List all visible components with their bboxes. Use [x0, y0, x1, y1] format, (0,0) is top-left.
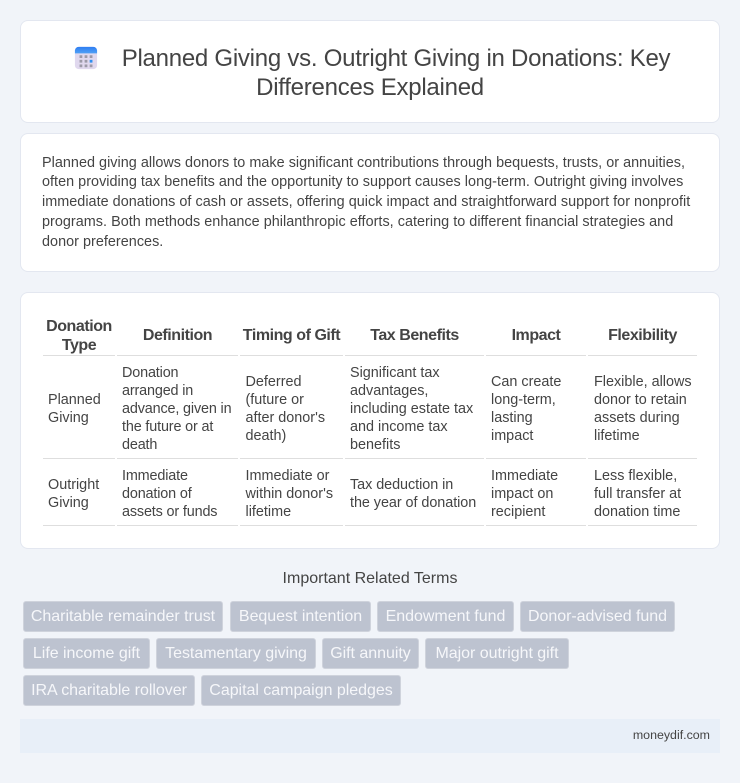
related term tags: Life income gift: [33, 645, 140, 662]
related term tags: Capital campaign pledges: [209, 682, 393, 699]
related term tags: IRA charitable rollover: [31, 682, 187, 699]
table row: outright giving: donation time: [594, 504, 680, 520]
heading: important related terms: Important Related Terms: [283, 570, 457, 587]
table row: planned giving: after donor's: [246, 410, 325, 426]
table row: planned giving: benefits: [350, 437, 400, 453]
table row: planned giving: [48, 365, 692, 453]
table row: outright giving: Tax deduction in: [350, 477, 453, 493]
table row: outright giving: impact on: [491, 486, 553, 502]
title: Differences Explained: [256, 74, 484, 100]
related term tags: Gift annuity: [330, 645, 411, 662]
footer: [20, 719, 720, 753]
table header row: Donation: [46, 318, 112, 335]
table header row: Flexibility: [608, 327, 677, 344]
table row: planned giving: arranged in: [122, 383, 193, 399]
table header row: Type: [62, 337, 96, 354]
related term tags: Donor-advised fund: [528, 608, 667, 625]
icon: calendar: [74, 46, 98, 70]
table row: planned giving: and income tax: [350, 419, 448, 435]
table row: planned giving: Giving: [48, 410, 89, 426]
intro paragraph: donor preferences.: [42, 234, 163, 250]
table row: outright giving: assets or funds: [122, 504, 217, 520]
table row: planned giving: advance, given in: [122, 401, 231, 417]
table row: outright giving: Immediate: [122, 468, 188, 484]
related term tags: Testamentary giving: [165, 645, 307, 662]
table row: planned giving: Flexible, allows: [594, 374, 692, 390]
table row: outright giving: donation of: [122, 486, 192, 502]
table row: outright giving: [48, 468, 682, 520]
table row: planned giving: donor to retain: [594, 392, 687, 408]
table row: planned giving: Planned: [48, 392, 101, 408]
intro paragraph: often providing tax benefits and the opportunity to support causes long-term. Outright giving involves: [42, 174, 683, 190]
table row: planned giving: including estate tax: [350, 401, 473, 417]
table row: outright giving: Immediate or: [246, 468, 329, 484]
table row: outright giving: Less flexible,: [594, 468, 677, 484]
table row: planned giving: death): [246, 428, 286, 444]
table row: planned giving: Deferred: [246, 374, 302, 390]
table header row: [46, 318, 678, 354]
related term tags: Endowment fund: [386, 608, 505, 625]
table row: outright giving: full transfer at: [594, 486, 681, 502]
table row: planned giving: the future or at: [122, 419, 213, 435]
table row: outright giving: the year of donation: [350, 495, 476, 511]
panel: header: [20, 20, 720, 123]
table header row: Tax Benefits: [370, 327, 459, 344]
table row: planned giving: long-term,: [491, 392, 556, 408]
table row: outright giving: Immediate: [491, 468, 558, 484]
related term tags: Charitable remainder trust: [31, 608, 215, 625]
table row: outright giving: recipient: [491, 504, 545, 520]
intro paragraph: Planned giving allows donors to make significant contributions through bequests, trusts, or annuities,: [42, 154, 685, 170]
table row: planned giving: death: [122, 437, 157, 453]
table row: planned giving: (future or: [246, 392, 304, 408]
related term tags: Major outright gift: [435, 645, 559, 662]
table row: planned giving: impact: [491, 428, 533, 444]
title: [122, 45, 670, 100]
table row: planned giving: assets during: [594, 410, 680, 426]
table row: outright giving: Outright: [48, 477, 99, 493]
panel: comparison table: [20, 292, 720, 549]
table header row: Definition: [143, 327, 212, 344]
table header row: Impact: [512, 327, 560, 344]
table row: planned giving: lasting: [491, 410, 533, 426]
table row: planned giving: advantages,: [350, 383, 428, 399]
intro paragraph: programs. Both methods enhance philanthropic efforts, catering to different financial strategies and: [42, 214, 673, 230]
intro paragraph: [42, 154, 690, 250]
related term tags: Bequest intention: [239, 608, 362, 625]
table header row: Timing of Gift: [243, 327, 340, 344]
table row: outright giving: lifetime: [246, 504, 291, 520]
table row: planned giving: Donation: [122, 365, 178, 381]
table row: outright giving: Giving: [48, 495, 89, 511]
table row: planned giving: lifetime: [594, 428, 640, 444]
table row: planned giving: Significant tax: [350, 365, 440, 381]
related term tags: [23, 601, 675, 706]
footer source: moneydif.com: [633, 728, 710, 742]
table row: outright giving: within donor's: [246, 486, 333, 502]
table row: planned giving: Can create: [491, 374, 561, 390]
intro paragraph: immediate donations of cash or assets, offering quick impact and straightforward support for nonprofit: [42, 194, 690, 210]
panel: introduction: [20, 133, 720, 272]
title: Planned Giving vs. Outright Giving in Donations: Key: [122, 45, 670, 72]
